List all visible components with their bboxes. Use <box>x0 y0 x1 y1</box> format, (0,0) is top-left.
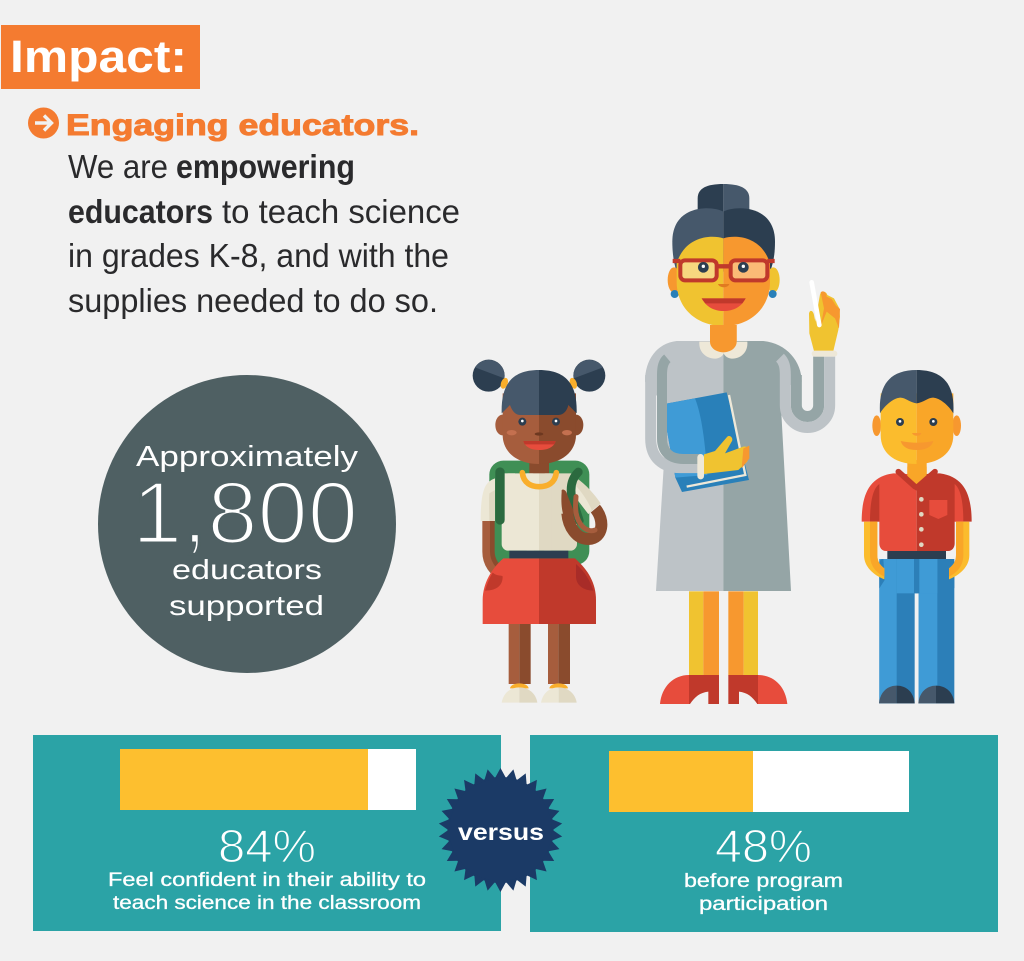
callout: 1,800 educators supported: Approximately <box>136 441 359 473</box>
teacher legs and shoes <box>660 591 787 704</box>
panel: 48% before program <box>530 735 998 932</box>
book <box>662 392 749 492</box>
text block: description: in grades K-8, and with the <box>68 237 449 274</box>
panel: 48% before program: 48% <box>715 820 812 872</box>
teacher upper body <box>645 184 840 591</box>
heading: Engaging educators: Engaging educators. <box>66 109 419 142</box>
text block: description: empowering <box>176 148 355 185</box>
callout: 1,800 educators supported: 1,800 <box>132 463 358 562</box>
text block: description: to teach science <box>222 193 460 230</box>
callout: 1,800 educators supported: educators <box>172 554 322 585</box>
text block: description: We are <box>68 148 168 185</box>
panel: 48% before program: participation <box>699 894 828 915</box>
glasses <box>680 260 717 280</box>
callout: 1,800 educators supported: supported <box>169 590 324 621</box>
title: Impact <box>1 25 200 89</box>
panel: 84% confident: 84% <box>218 820 316 872</box>
panel: 48% before program: before program <box>684 871 843 892</box>
panel: 84% confident <box>33 735 501 931</box>
illustration: boy <box>862 370 972 703</box>
bar: 48 percent <box>609 751 909 812</box>
text block: description <box>68 148 460 319</box>
text block: description: educators <box>68 193 213 230</box>
left arm <box>651 375 700 468</box>
raised arm <box>796 357 819 416</box>
illustration: teacher with book and chalk <box>645 184 840 704</box>
badge: versus: versus <box>458 819 544 845</box>
badge: versus <box>438 768 563 892</box>
dress <box>645 341 723 591</box>
bar: 84 percent <box>120 749 416 810</box>
hand on book <box>704 436 749 474</box>
title: Impact: Impact: <box>10 31 187 82</box>
icon: arrow in circle <box>28 108 59 138</box>
panel: 84% confident: teach science in the classroom <box>113 893 421 914</box>
text block: description: supplies needed to do so. <box>68 282 438 319</box>
hand with chalk <box>809 292 840 351</box>
panel: 84% confident: Feel confident in their ability to <box>108 870 426 891</box>
illustration: girl with backpack <box>473 360 605 703</box>
callout: 1,800 educators supported <box>98 375 396 673</box>
